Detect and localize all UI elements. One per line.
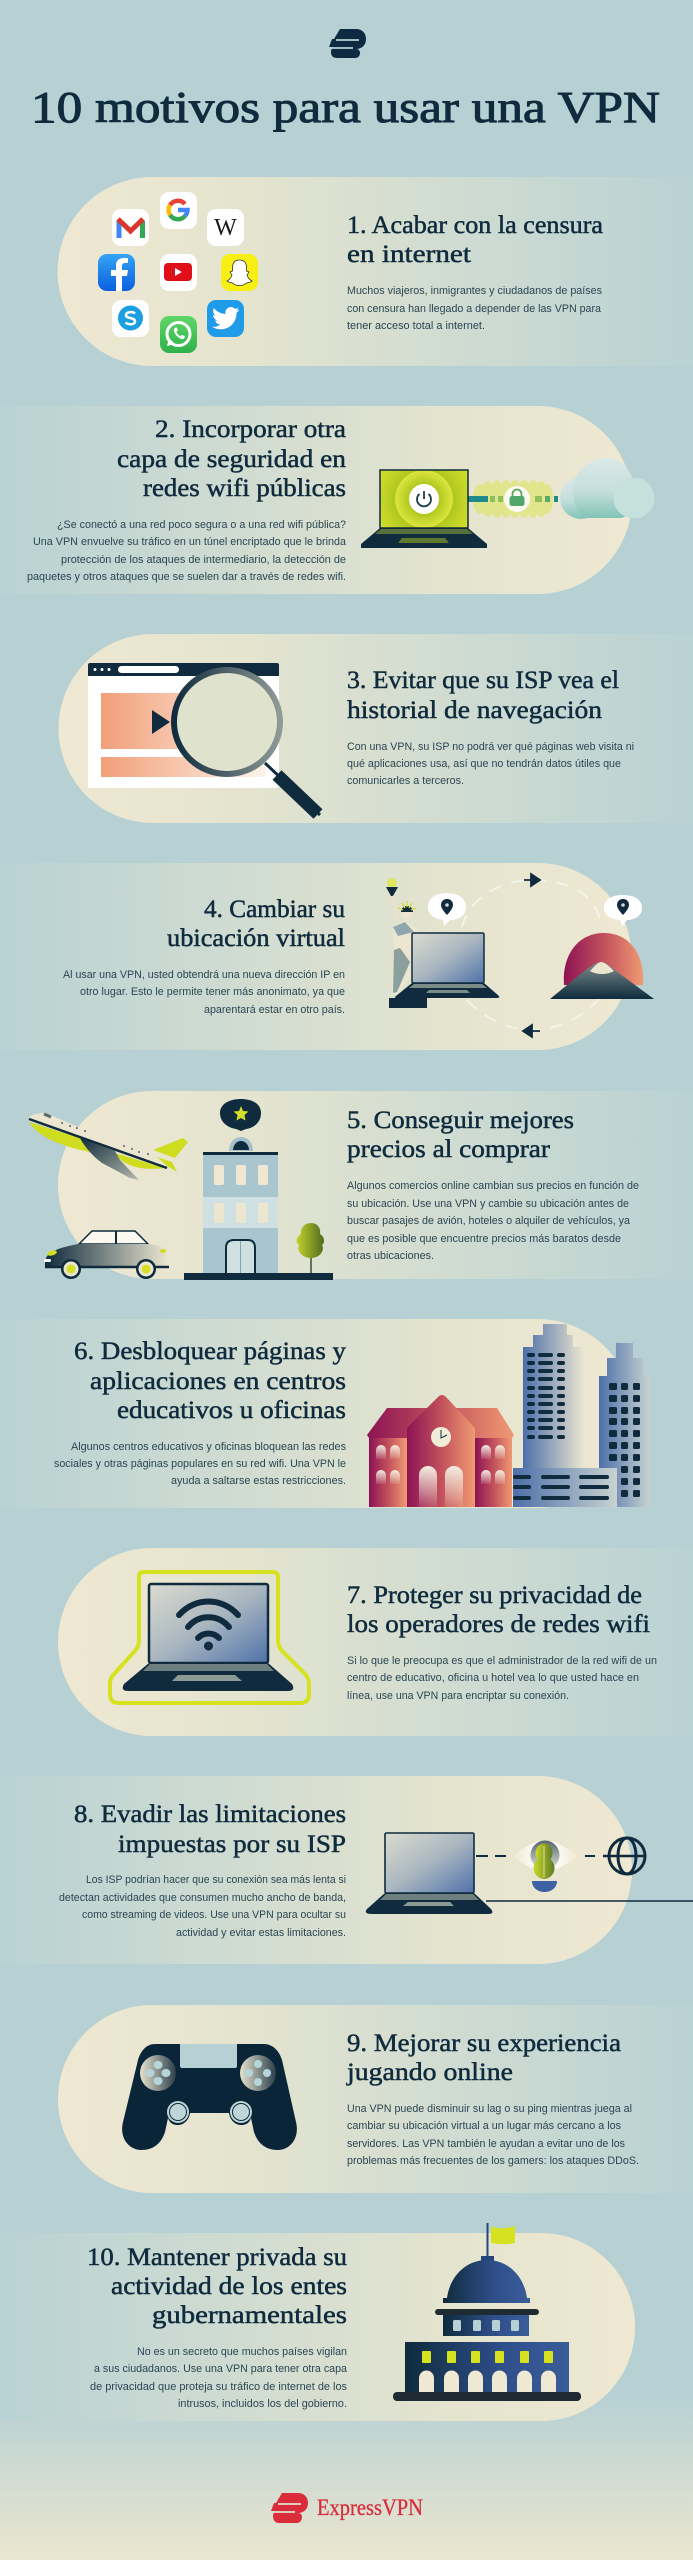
- text 7: centro de educativo, oficina u hotel vea lo que usted hace en: [347, 1672, 639, 1684]
- heading 8: [74, 1801, 346, 1858]
- heading 2: 2. Incorporar otra: [155, 416, 346, 443]
- text 5: buscar pasajes de avión, hoteles o alquiler de vehículos, ya: [347, 1215, 631, 1227]
- text 1: con censura han llegado a depender de las VPN para: [347, 303, 602, 315]
- illustration: school and office towers: [367, 1324, 650, 1507]
- lime outline: [110, 1572, 309, 1703]
- icon: Gmail: [112, 209, 149, 246]
- panel 7: wifi operators: [58, 1548, 693, 1736]
- heading 1: 1. Acabar con la censura: [347, 212, 603, 239]
- text 1: tener acceso total a internet.: [347, 320, 485, 332]
- text 5: otras ubicaciones.: [347, 1250, 434, 1262]
- heading 4: 4. Cambiar su: [204, 896, 345, 923]
- heading 4: [167, 896, 345, 952]
- illustration: browser and magnifier: [88, 663, 320, 815]
- touchpad: [180, 2044, 237, 2068]
- icon: YouTube: [160, 254, 197, 291]
- right stick: [230, 2101, 252, 2123]
- text 2: ¿Se conectó a una red poco segura o a una red wifi pública?: [57, 519, 346, 531]
- statue of liberty: [386, 878, 427, 1008]
- drum: [435, 2309, 539, 2336]
- heading 3: 3. Evitar que su ISP vea el: [347, 667, 619, 694]
- ground: [184, 1273, 333, 1280]
- panel 3: ISP history: [58, 634, 693, 823]
- text 9: [347, 2103, 639, 2167]
- dashes: [476, 1855, 610, 1857]
- heading 7: [347, 1582, 650, 1638]
- heading 9: 9. Mejorar su experiencia: [347, 2030, 621, 2057]
- laptop: [361, 470, 487, 548]
- heading 10: [87, 2244, 348, 2329]
- cloud: [560, 458, 654, 519]
- heading 3: historial de navegación: [347, 697, 603, 724]
- heading 5: precios al comprar: [347, 1136, 551, 1163]
- heading 10: actividad de los entes: [111, 2273, 347, 2300]
- heading 8: impuestas por su ISP: [118, 1831, 346, 1858]
- eye with plant: [513, 1840, 578, 1892]
- wifi symbol: [179, 1602, 238, 1648]
- panel 4: virtual location: [0, 863, 654, 1050]
- heading 3: [347, 667, 619, 724]
- text 4: Al usar una VPN, usted obtendrá una nueva dirección IP en: [63, 969, 345, 981]
- text 9: problemas más frecuentes de los gamers: los ataques DDoS.: [347, 2155, 639, 2167]
- text 9: Una VPN puede disminuir su lag o su ping mientras juega al: [347, 2103, 632, 2115]
- panel 9: gaming: [58, 2005, 693, 2193]
- text 5: Algunos comercios online cambian sus precios en función de: [347, 1180, 639, 1192]
- text 4: [63, 969, 345, 1016]
- title: 10 motivos para usar una VPN: [31, 83, 660, 132]
- icon: Skype: [112, 300, 149, 337]
- icons: app tiles: [98, 192, 258, 353]
- panel 5: better prices: [29, 1091, 693, 1280]
- text 2: protección de los ataques de intermediario, la detección de: [61, 554, 346, 566]
- icon: Wikipedia: [207, 209, 244, 246]
- text 7: [347, 1655, 657, 1702]
- illustration: game controller: [122, 2044, 297, 2150]
- text 6: ayuda a saltarse estas restricciones.: [171, 1475, 346, 1487]
- text 6: sociales y otras páginas populares en su red wifi. Una VPN le: [54, 1458, 346, 1470]
- school: [367, 1395, 514, 1507]
- panel 6: schools and offices: [0, 1319, 650, 1508]
- text 1: [347, 285, 602, 332]
- lock: [504, 486, 530, 512]
- main building: [393, 2342, 581, 2401]
- text 2: paquetes y otros ataques que se suelen dar a través de redes wifi.: [27, 571, 346, 583]
- dashed route: [462, 880, 600, 1030]
- laptop: [366, 1833, 492, 1914]
- footer logo: [271, 2493, 308, 2523]
- text 5: que es posible que encuentre precios más baratos desde: [347, 1233, 621, 1245]
- text 7: Si lo que le preocupa es que el administrador de la red wifi de un: [347, 1655, 657, 1667]
- laptop: [123, 1584, 293, 1691]
- heading 7: los operadores de redes wifi: [347, 1611, 650, 1638]
- text 6: Algunos centros educativos y oficinas bloquean las redes: [71, 1441, 346, 1453]
- icon: Wikipedia: W: [214, 215, 237, 241]
- hotel: [203, 1137, 278, 1273]
- text 9: servidores. Las VPN también le ayudan a evitar uno de los: [347, 2138, 625, 2150]
- text 8: [59, 1874, 346, 1939]
- text 3: comunicarles a terceros.: [347, 775, 464, 787]
- heading 9: [346, 2030, 621, 2086]
- panel 8: ISP limits: [0, 1776, 693, 1964]
- heading 8: 8. Evadir las limitaciones: [74, 1801, 346, 1828]
- pin bubble right: [604, 895, 642, 926]
- center tower: [523, 1324, 584, 1468]
- tunnel line: [468, 496, 558, 502]
- right tower: [599, 1343, 650, 1507]
- heading 4: ubicación virtual: [167, 925, 345, 952]
- cable: [486, 1900, 693, 1902]
- mountain and sun: [550, 933, 654, 999]
- text 3: Con una VPN, su ISP no podrá ver qué páginas web visita ni: [347, 741, 634, 753]
- heading 6: [74, 1338, 347, 1424]
- icon: Facebook: [98, 254, 135, 291]
- car: [44, 1231, 169, 1279]
- text 4: aparentará estar en otro país.: [204, 1004, 345, 1016]
- heading 2: [117, 416, 347, 502]
- text 5: [347, 1180, 639, 1262]
- illustration: laptop, tunnel and cloud: [361, 458, 654, 548]
- icon: Snapchat: [221, 254, 258, 291]
- panel 1: censorship: [58, 177, 693, 366]
- arrow: left: [523, 1025, 540, 1037]
- illustration: laptop, watching eye and globe: [366, 1833, 693, 1914]
- text 10: de privacidad que proteja su tráfico de internet de los: [90, 2381, 347, 2393]
- text 3: qué aplicaciones usa, así que no tendrán datos útiles que: [347, 758, 621, 770]
- text 6: [54, 1441, 346, 1487]
- text 2: Una VPN envuelve su tráfico en un túnel encriptado que le brinda: [33, 536, 347, 548]
- text 10: [90, 2346, 348, 2410]
- right buttons: [240, 2055, 276, 2091]
- heading 6: educativos u oficinas: [117, 1397, 346, 1424]
- heading 10: gubernamentales: [152, 2302, 347, 2329]
- low building: [513, 1468, 617, 1507]
- panel 10: government: [0, 2223, 635, 2421]
- footer wordmark: ExpressVPN: [317, 2495, 423, 2520]
- laptop: [395, 933, 499, 998]
- text 5: su ubicación. Use una VPN y cambie su ubicación antes de: [347, 1198, 629, 1210]
- illustration: capitol building: [393, 2223, 581, 2401]
- heading 1: en internet: [347, 241, 471, 268]
- text 1: Muchos viajeros, inmigrantes y ciudadanos de países: [347, 285, 602, 297]
- text 8: como streaming de videos. Use una VPN para ocultar su: [82, 1909, 346, 1921]
- arrow: right: [524, 874, 540, 886]
- dome: [443, 2256, 530, 2303]
- browser window: [88, 663, 279, 788]
- left stick: [167, 2101, 189, 2123]
- tree: [297, 1223, 324, 1274]
- plane: [29, 1113, 188, 1180]
- icon: Twitter: [207, 300, 244, 337]
- heading 2: capa de seguridad en: [117, 446, 347, 473]
- heading 1: [347, 212, 603, 268]
- illustration: plane, hotel, car and tree: [29, 1099, 333, 1280]
- heading 7: 7. Proteger su privacidad de: [347, 1582, 642, 1609]
- magnifier: [174, 670, 320, 815]
- text 7: línea, use una VPN para encriptar su conexión.: [347, 1690, 569, 1702]
- text 10: intrusos, incluidos los del gobierno.: [178, 2398, 347, 2410]
- heading 5: [347, 1107, 574, 1163]
- globe: [603, 1838, 646, 1874]
- heading 6: 6. Desbloquear páginas y: [74, 1338, 347, 1365]
- text 10: a sus ciudadanos. Use una VPN para tener otra capa: [94, 2363, 348, 2375]
- flag: [488, 2223, 515, 2258]
- heading 6: aplicaciones en centros: [90, 1368, 346, 1395]
- left buttons: [140, 2055, 176, 2091]
- illustration: location change: [386, 874, 654, 1037]
- clock: [431, 1427, 451, 1447]
- tunnel waves: [473, 480, 553, 518]
- illustration: laptop with wifi: [110, 1572, 309, 1703]
- text 3: [347, 741, 634, 787]
- heading 10: 10. Mantener privada su: [87, 2244, 348, 2271]
- icon: Google: [160, 192, 197, 229]
- text 2: [27, 519, 347, 583]
- pin bubble left: [428, 893, 466, 926]
- text 8: detectan actividades que consumen mucho ancho de banda,: [59, 1892, 346, 1904]
- icon: WhatsApp: [160, 316, 197, 353]
- location bubble: [220, 1099, 261, 1131]
- heading 9: jugando online: [346, 2059, 513, 2086]
- text 8: Los ISP podrían hacer que su conexión sea más lenta si: [86, 1874, 346, 1886]
- text 4: otro lugar. Esto le permite tener más anonimato, ya que: [80, 986, 345, 998]
- text 8: actividad y evitar estas limitaciones.: [176, 1927, 346, 1939]
- text 9: cambiar su ubicación virtual a un lugar más cercano a los: [347, 2120, 621, 2132]
- top logo: [329, 29, 366, 58]
- heading 5: 5. Conseguir mejores: [347, 1107, 574, 1134]
- text 10: No es un secreto que muchos países vigilan: [137, 2346, 347, 2358]
- panel 2: public wifi: [0, 406, 654, 594]
- heading 2: redes wifi públicas: [143, 475, 346, 502]
